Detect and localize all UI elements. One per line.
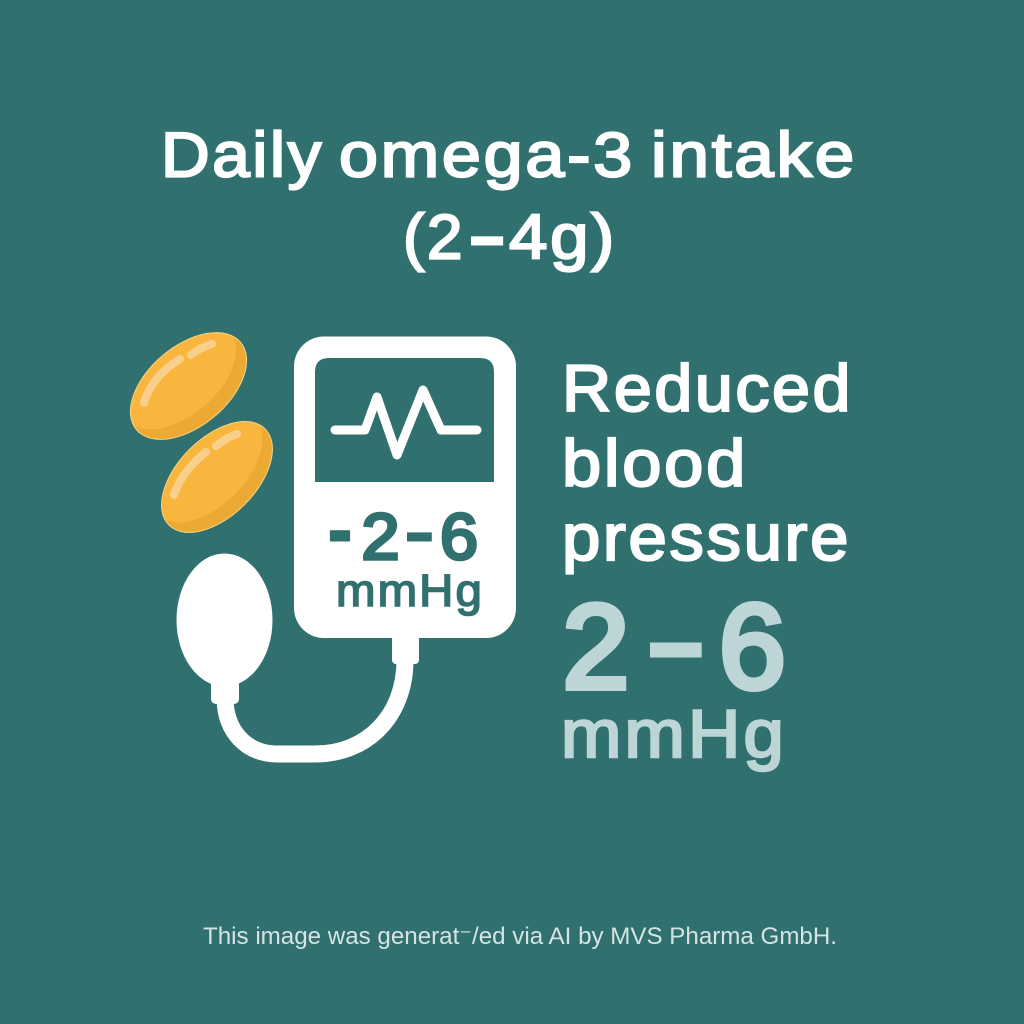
big value: 2–6 mmHg: 2 <box>562 580 629 714</box>
monitor screen <box>315 358 494 482</box>
label: reduced blood pressure: Reduced <box>562 351 853 425</box>
monitor reading: – <box>410 516 428 552</box>
title: Daily <box>161 120 324 190</box>
monitor reading: 2 <box>362 500 400 573</box>
heartbeat line <box>335 390 477 455</box>
footer note: This image was generat⁻/ed via AI by MVS Pharma GmbH. <box>203 923 837 950</box>
big value: 2–6 mmHg: 6 <box>719 580 786 714</box>
title <box>161 120 857 272</box>
icon: blood pressure monitor <box>294 336 516 638</box>
icon: blood pressure bulb and tube <box>176 554 419 754</box>
big value: 2–6 mmHg: – <box>655 601 697 685</box>
title: – <box>474 210 501 263</box>
capsule: upper <box>130 332 248 440</box>
icon: omega-3 capsules <box>130 332 273 533</box>
label: reduced blood pressure: blood <box>562 426 748 500</box>
infographic canvas <box>130 129 852 949</box>
monitor reading: 6 <box>440 500 478 573</box>
label: reduced blood pressure: pressure <box>562 500 851 574</box>
big value: 2–6 mmHg: mmHg <box>561 696 787 772</box>
monitor reading <box>331 500 484 616</box>
monitor reading: mmHg <box>336 565 484 616</box>
title: intake <box>651 120 857 190</box>
capsule: lower <box>161 421 273 533</box>
big value: 2–6 mmHg <box>561 580 787 772</box>
title: omega-3 <box>339 120 635 190</box>
title: 4g) <box>509 202 617 272</box>
monitor reading: - <box>331 502 349 562</box>
title: (2 <box>403 202 465 272</box>
label: reduced blood pressure <box>562 351 853 574</box>
